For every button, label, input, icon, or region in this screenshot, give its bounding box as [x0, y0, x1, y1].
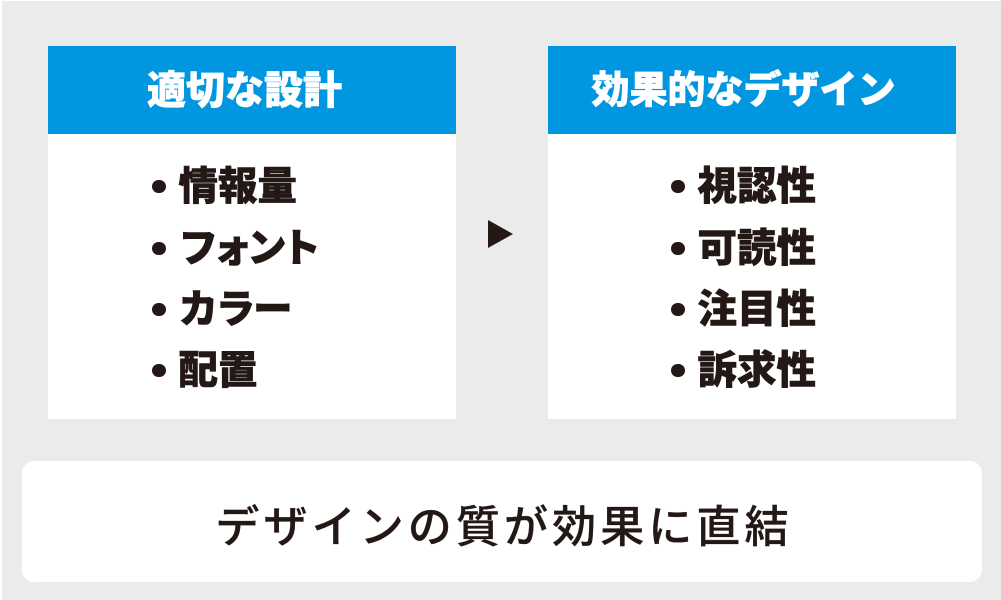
heading: appropriate design: 適切な設計	[147, 70, 342, 113]
list item: information amount	[152, 165, 297, 209]
panel: effective design: 注目性	[698, 288, 816, 332]
list item: attention	[671, 288, 816, 332]
panel: effective design: 訴求性	[698, 349, 816, 393]
callout: conclusion	[22, 461, 982, 582]
heading: effective design: 効果的なデザイン	[591, 70, 896, 112]
panel: appropriate design	[48, 46, 456, 419]
panel: effective design: 可読性	[698, 227, 816, 271]
panel: effective design: 視認性	[698, 165, 816, 209]
list item: color	[152, 288, 290, 332]
arrow	[488, 220, 513, 248]
list item: appeal	[671, 349, 816, 393]
panel: appropriate design: フォント	[178, 227, 316, 271]
panel: appropriate design: カラー	[178, 288, 290, 332]
list item: visibility	[671, 165, 816, 209]
heading: effective design	[548, 46, 956, 134]
panel: effective design	[548, 46, 956, 419]
panel: appropriate design: 配置	[178, 349, 258, 393]
panel: appropriate design: 情報量	[178, 165, 297, 209]
list item: placement	[152, 349, 258, 393]
list item: readability	[671, 227, 816, 271]
callout: conclusion: デザインの質が効果に直結	[215, 503, 793, 552]
list item: font	[152, 227, 316, 271]
heading: appropriate design	[48, 46, 456, 134]
